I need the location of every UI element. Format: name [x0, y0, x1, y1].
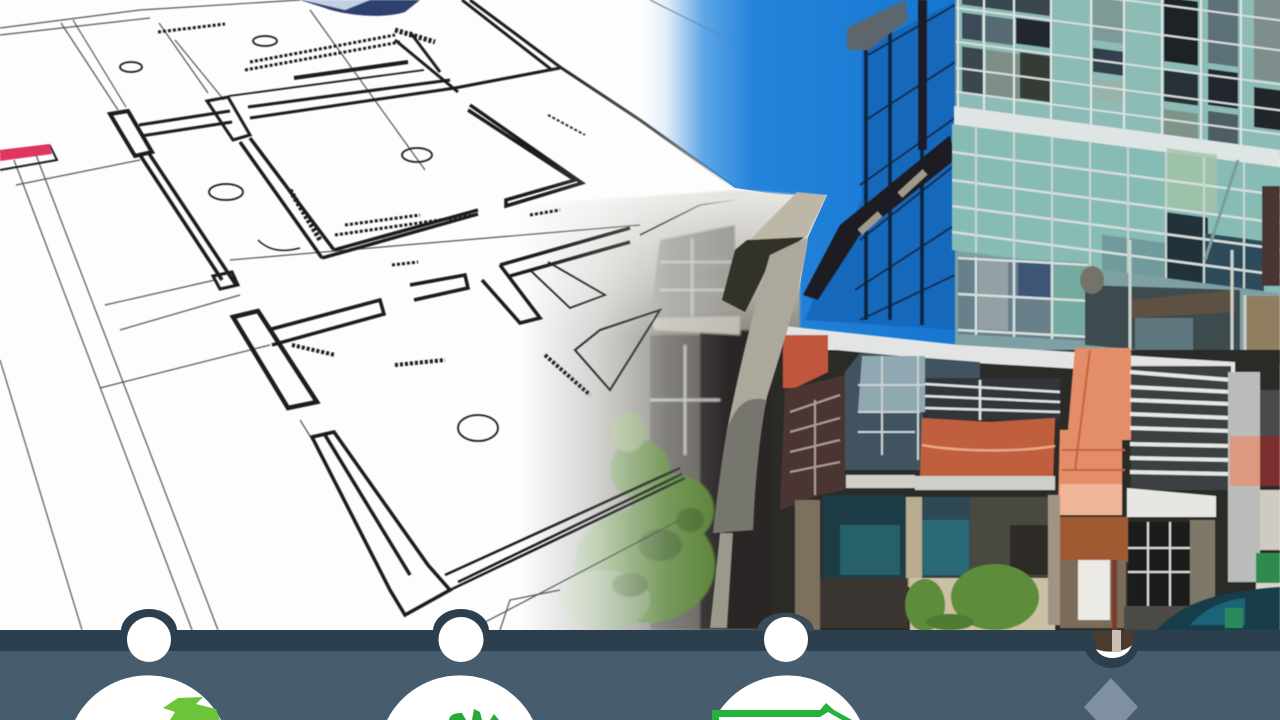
paper roll at top: [300, 0, 420, 16]
rooftop overhang: [847, 0, 908, 50]
corner glass balcony: [845, 353, 980, 470]
bottom step band: [0, 609, 1280, 720]
lower glass floors: [952, 120, 1280, 293]
column A: [110, 111, 152, 156]
left dark pillar: [795, 500, 820, 630]
room tags: [120, 36, 498, 441]
step marker 2: [433, 609, 489, 662]
red marked wall: [0, 146, 57, 170]
step marker 3: [757, 613, 814, 662]
building: storefront level: [770, 326, 1280, 632]
parked car: [1155, 587, 1280, 632]
horizontal rails: [925, 378, 1060, 420]
white floor band: [954, 106, 1280, 174]
orange mesh: [920, 418, 1055, 480]
grid window: [1128, 522, 1190, 606]
main room walls: [240, 105, 582, 258]
balcony ledge: [846, 475, 1055, 490]
upper glass floors: [956, 0, 1280, 158]
lower walls: [233, 195, 770, 615]
curved door swing: [258, 240, 300, 250]
upper walls: [139, 0, 735, 188]
building: tower glass facade: [952, 0, 1280, 365]
right dark windows: [1262, 186, 1280, 286]
icon: green outlined plan: [712, 703, 852, 720]
blueprint linework: [0, 0, 770, 630]
base glass floor: [958, 256, 1088, 341]
sky: [640, 0, 962, 345]
paper fold lines: [0, 0, 770, 630]
trees in front of the wing: [560, 412, 715, 630]
right white slab: [1127, 488, 1216, 517]
left long wall: [140, 152, 236, 285]
scribble annotations (non-text hatch marks): [158, 24, 590, 395]
step 1 circle (cropped at the frame edge): [75, 675, 221, 720]
icon: green house: [163, 697, 220, 720]
band body: [0, 650, 1280, 720]
white balcony slab: [785, 326, 1235, 372]
ground floor windows: [822, 495, 907, 580]
column B: [207, 97, 250, 140]
step marker 4: open notch showing the photo: [1083, 630, 1140, 668]
building: concrete curved column: [710, 192, 827, 628]
building: tower blue side: [803, 0, 958, 330]
step 3 circle (cropped at the frame edge): [712, 675, 860, 720]
red wall highlight: [0, 144, 52, 161]
tall orange panel: [1058, 348, 1131, 515]
icon: green plant: [449, 709, 499, 720]
step 4 diamond (cropped at the frame edge): [1084, 678, 1138, 720]
band top strip: [0, 630, 1280, 651]
white louvres: [1131, 366, 1231, 490]
facade backing: [955, 0, 1280, 360]
shopfront door block: [1060, 517, 1128, 562]
right column: [1228, 372, 1260, 582]
open floor: [1085, 285, 1240, 360]
dark truss diagonal: [803, 135, 955, 300]
building: fading lower-left wing: [520, 190, 810, 640]
step marker 1: [121, 609, 177, 662]
red-orange upper panel: [783, 335, 828, 388]
scaffolding wrap: [780, 375, 845, 510]
step 2 circle (cropped at the frame edge): [387, 675, 533, 720]
bushes: [905, 564, 1039, 631]
